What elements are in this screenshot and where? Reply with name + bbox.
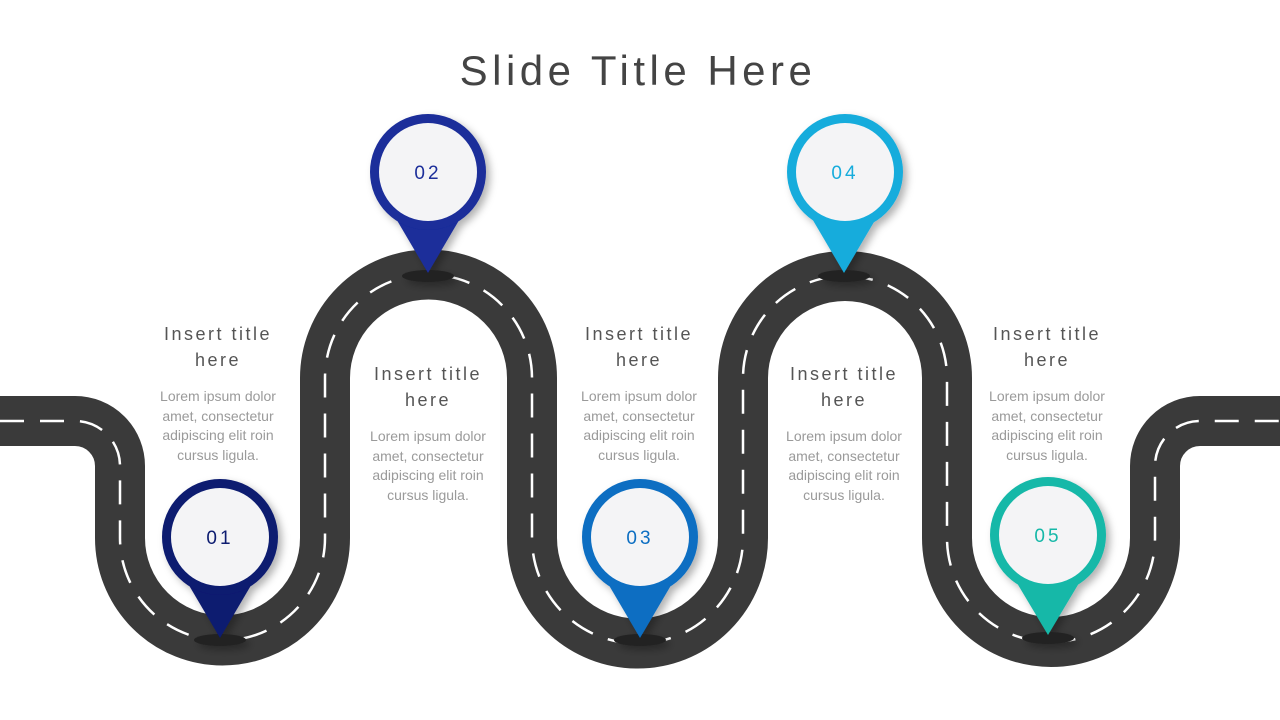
text block 2	[370, 364, 486, 503]
pin 04	[787, 114, 903, 282]
pin 04: 04	[831, 163, 859, 184]
text block 1: Lorem ipsum dolor amet, consectetur adipiscing elit roin cursus ligula.	[160, 388, 276, 462]
text block 1: Insert title here	[164, 324, 272, 370]
text block 3: Insert title here	[585, 324, 693, 370]
text block 4	[786, 364, 902, 503]
pin 01	[162, 479, 278, 646]
text block 5	[989, 324, 1105, 463]
text block 5: Lorem ipsum dolor amet, consectetur adipiscing elit roin cursus ligula.	[989, 388, 1105, 462]
text block 1	[160, 324, 276, 463]
text block 2: Insert title here	[374, 364, 482, 410]
text block 5: Insert title here	[993, 324, 1101, 370]
text block 3: Lorem ipsum dolor amet, consectetur adipiscing elit roin cursus ligula.	[581, 388, 697, 462]
pin 02: 02	[414, 163, 442, 184]
text block 3	[581, 324, 697, 463]
text block 4: Insert title here	[790, 364, 898, 410]
pin 03: 03	[626, 528, 654, 549]
pin 05: 05	[1034, 526, 1062, 547]
text block 4: Lorem ipsum dolor amet, consectetur adipiscing elit roin cursus ligula.	[786, 428, 902, 502]
pin 02	[370, 114, 486, 282]
text block 2: Lorem ipsum dolor amet, consectetur adipiscing elit roin cursus ligula.	[370, 428, 486, 502]
pin 01: 01	[206, 528, 234, 549]
pin 03	[582, 479, 698, 646]
title: Slide Title Here	[460, 47, 816, 94]
pin 05	[990, 477, 1106, 644]
